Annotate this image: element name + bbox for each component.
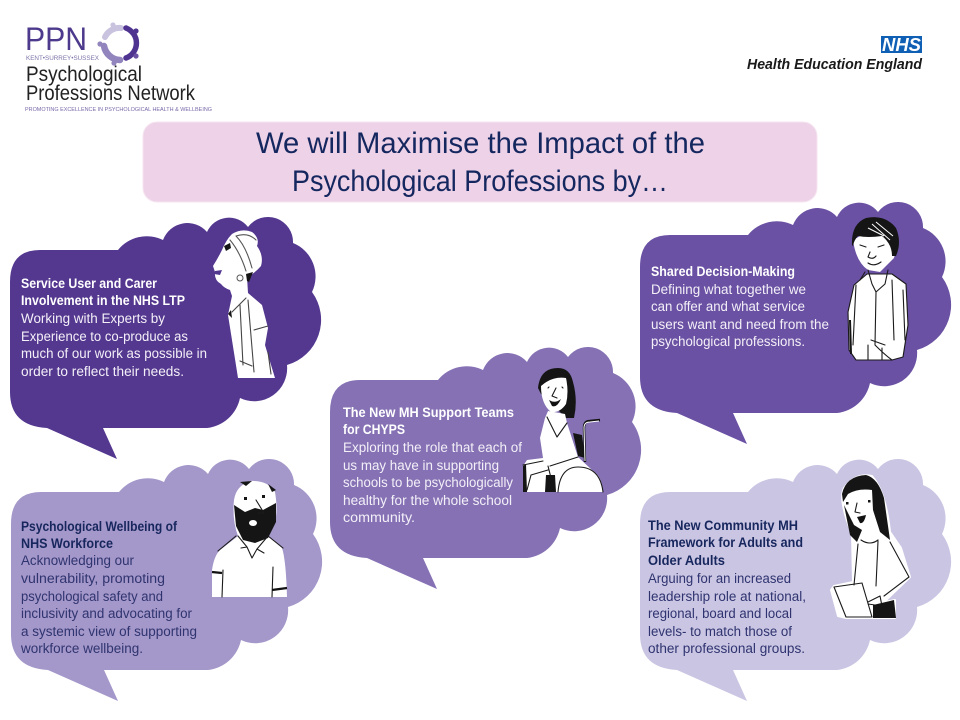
body text xyxy=(651,282,829,349)
body text: much of our work as possible in xyxy=(21,346,207,361)
body text xyxy=(648,571,806,656)
heading xyxy=(648,518,803,568)
body text: order to reflect their needs. xyxy=(21,364,184,379)
illustration: bearded man xyxy=(212,481,287,597)
body text: vulnerability, promoting xyxy=(21,571,165,586)
heading: for CHYPS xyxy=(343,422,405,437)
illustration: man in jacket xyxy=(848,217,908,360)
logo wordmark PPN: PPN xyxy=(25,21,87,57)
title line one: We will Maximise the Impact of the xyxy=(256,127,705,160)
speech bubble xyxy=(11,459,322,701)
body text xyxy=(343,440,522,525)
panel: service user and carer involvement xyxy=(10,217,321,459)
title banner xyxy=(143,122,817,202)
NHS letters: NHS xyxy=(882,35,921,55)
panel: new MH support teams for CHYPS xyxy=(330,347,641,589)
body text: Defining what together we xyxy=(651,282,806,297)
title line two: Psychological Professions by… xyxy=(292,165,668,198)
heading: The New Community MH xyxy=(648,518,798,533)
body text: Arguing for an increased xyxy=(648,571,791,586)
body text: Acknowledging our xyxy=(21,553,134,568)
NHS blue lozenge xyxy=(881,36,922,53)
heading: NHS Workforce xyxy=(21,536,113,551)
heading xyxy=(21,276,185,308)
organisation name: Health Education England xyxy=(747,57,923,73)
body text: levels- to match those of xyxy=(648,624,792,639)
panel: shared decision-making xyxy=(640,202,951,444)
body text: users want and need from the xyxy=(651,317,829,332)
body text xyxy=(21,311,207,379)
illustration: woman with folder xyxy=(831,475,910,618)
heading: Older Adults xyxy=(648,553,725,568)
heading: The New MH Support Teams xyxy=(343,405,514,420)
body text: Experience to co-produce as xyxy=(21,329,188,344)
body text xyxy=(20,553,197,656)
body text: healthy for the whole school xyxy=(343,493,512,508)
logo: NHS Health Education England xyxy=(747,35,923,73)
logo: Psychological Professions Network xyxy=(25,21,212,113)
speech bubble xyxy=(330,347,641,589)
panel: new community MH framework xyxy=(640,459,951,701)
logo emblem: ring of people xyxy=(97,22,139,66)
body text: a systemic view of supporting xyxy=(21,624,197,639)
body text: psychological safety and xyxy=(21,589,163,604)
body text: other professional groups. xyxy=(648,641,805,656)
heading: Service User and Carer xyxy=(21,276,158,291)
body text: regional, board and local xyxy=(648,606,792,621)
heading: Psychological Wellbeing of xyxy=(21,519,177,534)
body text: Working with Experts by xyxy=(21,311,165,326)
logo name line two: Professions Network xyxy=(26,82,195,105)
body text: can offer and what service xyxy=(651,299,805,314)
body text: schools to be psychologically xyxy=(343,475,513,490)
logo name line one: Psychological xyxy=(26,63,142,86)
body text: leadership role at national, xyxy=(648,589,806,604)
panel: psychological wellbeing of NHS workforce xyxy=(11,459,322,701)
body text: inclusivity and advocating for xyxy=(21,606,192,621)
illustration: woman in headwrap xyxy=(213,230,275,378)
body text: community. xyxy=(343,510,415,525)
body text: workforce wellbeing. xyxy=(20,641,143,656)
speech bubble xyxy=(640,459,951,701)
body text: us may have in supporting xyxy=(343,458,499,473)
speech bubble xyxy=(10,217,321,459)
logo tagline: PROMOTING EXCELLENCE IN PSYCHOLOGICAL HEALTH & WELLBEING xyxy=(25,107,212,113)
body text: psychological professions. xyxy=(651,334,805,349)
logo region line: KENT•SURREY•SUSSEX xyxy=(26,55,100,62)
speech bubble xyxy=(640,202,951,444)
heading: Involvement in the NHS LTP xyxy=(21,293,185,308)
illustration: woman in wheelchair xyxy=(523,368,603,492)
body text: Exploring the role that each of xyxy=(343,440,522,455)
heading: Shared Decision-Making xyxy=(651,264,795,279)
heading xyxy=(21,519,177,551)
heading xyxy=(343,405,514,437)
heading: Framework for Adults and xyxy=(648,535,803,550)
